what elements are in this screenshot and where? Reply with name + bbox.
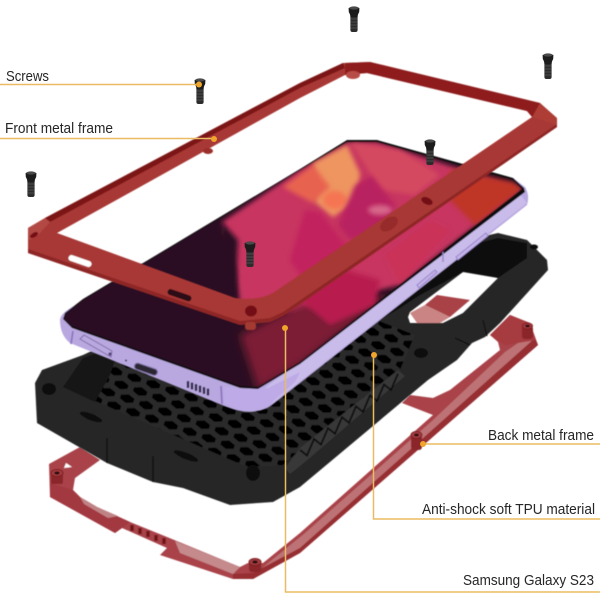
screws — [26, 6, 553, 267]
callout: Back metal frame — [420, 427, 600, 447]
callout: Anti-shock soft TPU material — [371, 352, 600, 519]
honeycomb interior — [63, 290, 415, 467]
shock-absorbing zigzag band — [285, 370, 405, 474]
callout: Front metal frame: Front metal frame — [5, 120, 113, 137]
dark interior near camera — [380, 238, 527, 320]
port details: SIM tray, mic, USB-C, speaker — [80, 335, 208, 396]
screen wallpaper — [64, 141, 523, 388]
front metal frame — [28, 62, 557, 330]
back frame seen through camera opening — [410, 295, 470, 323]
frame thickness shading — [45, 63, 345, 222]
callout: Screws: Screws — [6, 68, 49, 85]
callout: Samsung Galaxy S23 — [282, 325, 600, 592]
callout: Screws — [0, 68, 202, 88]
phone: Samsung Galaxy S23 — [50, 130, 540, 412]
back metal frame — [49, 315, 538, 579]
side buttons — [417, 233, 488, 288]
callout: Front metal frame — [0, 120, 217, 142]
black TPU case — [35, 233, 548, 505]
